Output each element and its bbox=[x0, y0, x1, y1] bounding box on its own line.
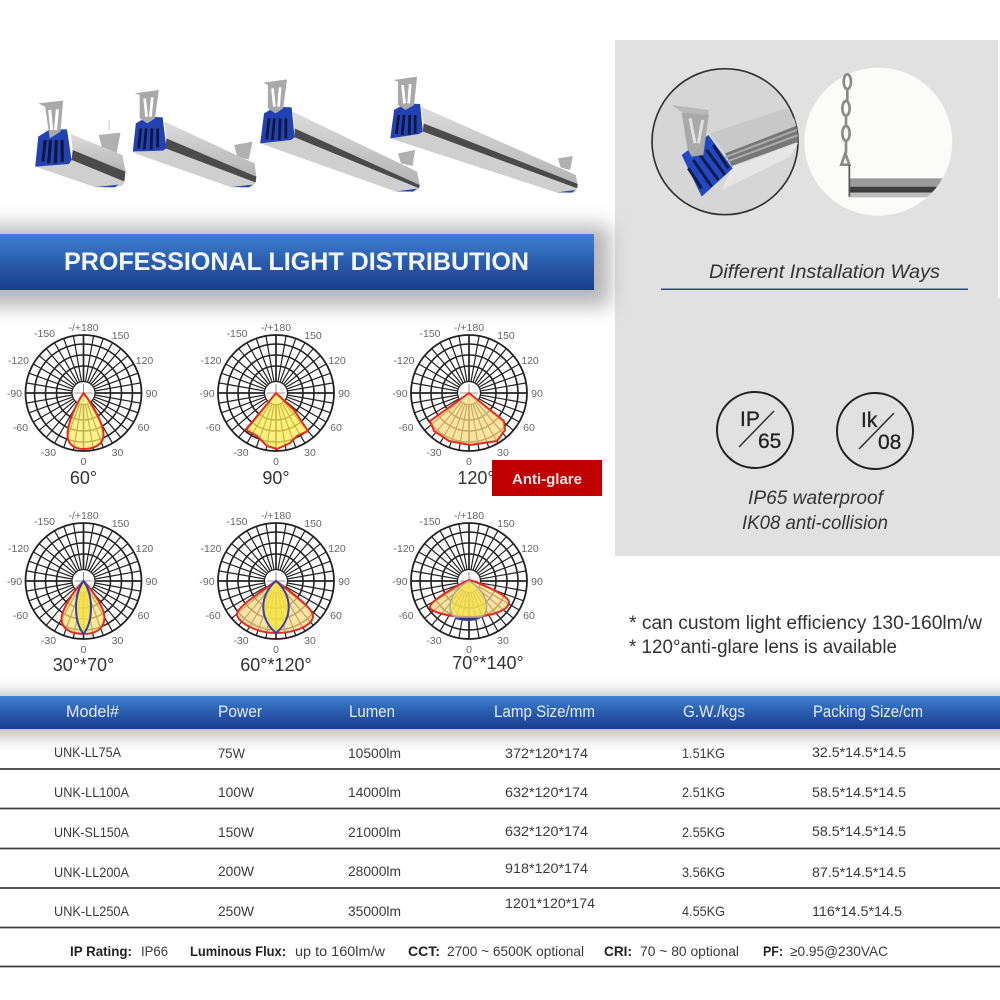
beam shape 120 bbox=[430, 393, 505, 445]
axis labels: 120 bbox=[136, 543, 153, 555]
lamp 1 bbox=[35, 101, 126, 187]
axis labels: -30 bbox=[426, 635, 442, 647]
beam arc blue bbox=[455, 618, 479, 620]
axis labels: -60 bbox=[398, 610, 414, 622]
axis labels: 30 bbox=[304, 447, 316, 459]
icon: chain suspension circle bbox=[804, 68, 957, 216]
footer: spec summary: up to 160lm/w bbox=[295, 943, 386, 959]
axis labels: 120 bbox=[521, 355, 539, 367]
axis labels: 0 bbox=[466, 456, 472, 468]
axis labels: 0 bbox=[273, 644, 279, 656]
axis labels: -/+180 bbox=[68, 510, 99, 522]
row: UNK-LL75A: 1.51KG bbox=[682, 745, 725, 761]
axis labels: 90 bbox=[146, 388, 157, 400]
axis labels: 30 bbox=[497, 635, 509, 647]
row: UNK-LL250A: 116*14.5*14.5 bbox=[812, 903, 902, 919]
row: UNK-SL150A: 58.5*14.5*14.5 bbox=[812, 823, 906, 839]
axis labels: 60 bbox=[523, 610, 535, 622]
row: UNK-LL200A: 28000lm bbox=[348, 863, 401, 879]
beam shape 90 bbox=[246, 393, 308, 449]
axis labels bbox=[7, 510, 157, 656]
row: UNK-LL250A: 35000lm bbox=[348, 903, 401, 919]
axis labels: -60 bbox=[13, 610, 28, 622]
axis labels: -/+180 bbox=[454, 510, 484, 522]
angle label: 60° bbox=[70, 468, 97, 488]
axis labels bbox=[199, 510, 350, 656]
axis labels: 150 bbox=[304, 518, 322, 530]
row: UNK-SL150A: UNK-SL150A bbox=[54, 824, 130, 840]
product photos: four linear lamps bbox=[35, 77, 578, 193]
row: UNK-LL75A bbox=[54, 744, 906, 761]
axis labels: 150 bbox=[304, 330, 322, 342]
axis labels: -120 bbox=[200, 355, 222, 367]
beam shape wide bbox=[237, 581, 313, 633]
table header row: G.W./kgs bbox=[683, 703, 745, 721]
row: UNK-LL100A: UNK-LL100A bbox=[54, 784, 130, 800]
axis labels: -150 bbox=[226, 516, 248, 528]
table header row: Lamp Size/mm bbox=[494, 703, 595, 721]
axis labels: -60 bbox=[205, 610, 221, 622]
axis labels: -120 bbox=[393, 543, 415, 555]
lamp 3 bbox=[260, 79, 420, 192]
lamp 4 bbox=[390, 77, 578, 193]
row: UNK-LL200A: 87.5*14.5*14.5 bbox=[812, 864, 906, 880]
note: custom efficiency: * can custom light efficiency 130-160lm/w bbox=[629, 613, 982, 634]
axis labels: -90 bbox=[7, 388, 22, 400]
axis labels: 90 bbox=[338, 388, 350, 400]
heading: banner title: PROFESSIONAL LIGHT DISTRIBUTION bbox=[64, 248, 529, 276]
axis labels: -30 bbox=[426, 447, 442, 459]
footer: spec summary: Luminous Flux: bbox=[190, 943, 286, 959]
axis labels: 60 bbox=[330, 422, 342, 434]
icon: IP65 badge bbox=[717, 392, 793, 468]
axis labels: 90 bbox=[531, 388, 543, 400]
axis labels: -60 bbox=[13, 422, 28, 434]
row: UNK-LL100A bbox=[54, 784, 906, 800]
axis labels: -120 bbox=[8, 355, 29, 367]
table header row: Model# bbox=[66, 703, 120, 721]
footer: spec summary bbox=[70, 943, 888, 959]
polar chart: 90 degrees bbox=[199, 322, 350, 488]
callout: anti-glare: Anti-glare bbox=[512, 471, 582, 488]
row: UNK-LL100A: 58.5*14.5*14.5 bbox=[812, 784, 906, 800]
axis labels bbox=[199, 322, 350, 468]
icon: IK08 badge: Ik bbox=[861, 409, 878, 432]
axis labels: 60 bbox=[523, 422, 535, 434]
axis labels: -90 bbox=[392, 388, 408, 400]
row: UNK-LL75A: 372*120*174 bbox=[505, 745, 588, 761]
row: UNK-LL250A: UNK-LL250A bbox=[54, 903, 130, 919]
beam shape wide bbox=[62, 581, 104, 634]
row: UNK-LL250A bbox=[54, 895, 902, 919]
banner shadow bbox=[0, 226, 610, 306]
axis labels: -90 bbox=[199, 576, 215, 588]
row: UNK-SL150A: 632*120*174 bbox=[505, 823, 588, 839]
beam shape narrow bbox=[263, 581, 289, 633]
axis labels: 30 bbox=[497, 447, 509, 459]
installation illustrations bbox=[652, 68, 957, 216]
table header row: Power bbox=[218, 703, 262, 721]
footer: spec summary: ≥0.95@230VAC bbox=[790, 943, 888, 959]
row: UNK-LL200A: 918*120*174 bbox=[505, 860, 588, 876]
axis labels: 90 bbox=[146, 576, 157, 588]
polar chart: 60x120 degrees bbox=[199, 510, 350, 675]
axis labels: -60 bbox=[205, 422, 221, 434]
callout: anti-glare bbox=[492, 460, 602, 496]
row: UNK-LL250A: 1201*120*174 bbox=[505, 895, 595, 911]
footer: spec summary: 2700 ~ 6500K optional bbox=[447, 943, 584, 959]
axis labels: 60 bbox=[330, 610, 342, 622]
table header shadow bbox=[0, 692, 1000, 738]
axis labels: -/+180 bbox=[68, 322, 99, 334]
axis labels: 120 bbox=[328, 543, 346, 555]
axis labels: -30 bbox=[233, 635, 249, 647]
table row lines bbox=[0, 769, 1000, 966]
row: UNK-LL250A: 4.55KG bbox=[682, 903, 725, 919]
axis labels: 30 bbox=[304, 635, 316, 647]
row: UNK-LL75A: UNK-LL75A bbox=[54, 744, 122, 760]
polar chart: 60 degrees bbox=[7, 322, 157, 488]
axis labels: 0 bbox=[81, 644, 87, 656]
angle label: 60°*120° bbox=[240, 655, 312, 675]
axis labels: -150 bbox=[226, 328, 248, 340]
row: UNK-LL75A: 10500lm bbox=[348, 745, 401, 761]
axis labels: 60 bbox=[138, 610, 149, 622]
axis labels: -150 bbox=[419, 328, 441, 340]
axis labels: -30 bbox=[41, 635, 56, 647]
icon: IK08 badge: 08 bbox=[878, 431, 901, 454]
row: UNK-LL100A: 14000lm bbox=[348, 784, 401, 800]
angle label: 90° bbox=[262, 468, 290, 488]
caption: different installation ways: Different Installation Ways bbox=[709, 262, 941, 283]
row: UNK-LL100A: 2.51KG bbox=[682, 784, 725, 800]
footer: spec summary: IP Rating: bbox=[70, 943, 132, 959]
axis labels: 90 bbox=[338, 576, 350, 588]
panel: installation background bbox=[615, 40, 1000, 556]
banner: professional light distribution bbox=[0, 234, 594, 290]
axis labels: 60 bbox=[138, 422, 149, 434]
polar chart: 70x140 degrees bbox=[392, 510, 543, 673]
row: UNK-SL150A: 150W bbox=[218, 824, 255, 840]
beam shape narrow bbox=[450, 581, 487, 617]
axis labels: 90 bbox=[531, 576, 543, 588]
axis labels: -/+180 bbox=[261, 510, 291, 522]
axis labels: 30 bbox=[112, 447, 123, 459]
axis labels: 120 bbox=[521, 543, 539, 555]
row: UNK-SL150A: 2.55KG bbox=[682, 824, 725, 840]
footer: spec summary: IP66 bbox=[141, 943, 168, 959]
axis labels: -90 bbox=[7, 576, 22, 588]
polar chart: 120 degrees bbox=[392, 322, 543, 488]
row: UNK-LL250A: 250W bbox=[218, 903, 255, 919]
row: UNK-LL200A: 3.56KG bbox=[682, 864, 725, 880]
axis labels: 0 bbox=[273, 456, 279, 468]
icon: IP65 badge: IP bbox=[740, 408, 760, 431]
row: UNK-LL100A: 100W bbox=[218, 784, 255, 800]
footer: spec summary: CRI: bbox=[604, 943, 632, 959]
axis labels: -/+180 bbox=[454, 322, 484, 334]
axis labels: -150 bbox=[34, 516, 55, 528]
table header row: Packing Size/cm bbox=[813, 703, 923, 721]
axis labels: 150 bbox=[497, 330, 515, 342]
axis labels: 150 bbox=[112, 330, 129, 342]
table: specifications bbox=[0, 696, 1000, 966]
row: UNK-LL75A: 75W bbox=[218, 745, 246, 761]
caption underline bbox=[661, 288, 968, 290]
axis labels: -90 bbox=[199, 388, 215, 400]
row: UNK-LL75A: 32.5*14.5*14.5 bbox=[812, 744, 906, 760]
axis labels: -/+180 bbox=[261, 322, 291, 334]
beam shape 60 bbox=[68, 393, 104, 449]
axis labels: -30 bbox=[233, 447, 249, 459]
axis labels: 0 bbox=[81, 456, 87, 468]
axis labels: 120 bbox=[328, 355, 346, 367]
axis labels: 150 bbox=[497, 518, 515, 530]
footer: spec summary: 70 ~ 80 optional bbox=[640, 943, 739, 959]
axis labels: -150 bbox=[34, 328, 55, 340]
row: UNK-SL150A bbox=[54, 823, 906, 840]
row: UNK-LL200A: UNK-LL200A bbox=[54, 864, 130, 880]
text: IK08 anti-collision: IK08 anti-collision bbox=[742, 513, 888, 534]
angle label: 120° bbox=[457, 468, 495, 488]
table header row: Lumen bbox=[349, 703, 395, 721]
text: IP65 waterproof: IP65 waterproof bbox=[748, 488, 885, 509]
axis labels: 150 bbox=[112, 518, 129, 530]
table header row bbox=[0, 696, 1000, 729]
icon: IP65 badge: 65 bbox=[758, 430, 781, 453]
footer: spec summary: PF: bbox=[763, 943, 783, 959]
lamp 2 bbox=[133, 90, 256, 187]
row: UNK-LL200A bbox=[54, 860, 906, 880]
angle label: 70°*140° bbox=[452, 653, 524, 673]
angle label: 30°*70° bbox=[53, 655, 114, 675]
axis labels: -60 bbox=[398, 422, 414, 434]
axis labels: -150 bbox=[419, 516, 441, 528]
polar chart: 30x70 degrees bbox=[7, 510, 157, 675]
icon: IK08 badge bbox=[837, 393, 913, 469]
axis labels: -120 bbox=[8, 543, 29, 555]
beam shape narrow bbox=[76, 581, 91, 634]
axis labels bbox=[7, 322, 157, 468]
axis labels: 0 bbox=[466, 644, 472, 656]
row: UNK-LL100A: 632*120*174 bbox=[505, 784, 588, 800]
icon: bracket mount circle bbox=[652, 69, 798, 215]
axis labels: -90 bbox=[392, 576, 408, 588]
row: UNK-SL150A: 21000lm bbox=[348, 824, 401, 840]
note: anti-glare lens: * 120°anti-glare lens is available bbox=[629, 637, 897, 658]
axis labels: -120 bbox=[393, 355, 415, 367]
axis labels: 30 bbox=[112, 635, 123, 647]
axis labels bbox=[392, 322, 543, 468]
axis labels: -120 bbox=[200, 543, 222, 555]
axis labels: 120 bbox=[136, 355, 153, 367]
beam shape wide bbox=[430, 580, 509, 617]
axis labels: -30 bbox=[41, 447, 56, 459]
axis labels bbox=[392, 510, 543, 656]
footer: spec summary: CCT: bbox=[408, 943, 440, 959]
row: UNK-LL200A: 200W bbox=[218, 863, 255, 879]
